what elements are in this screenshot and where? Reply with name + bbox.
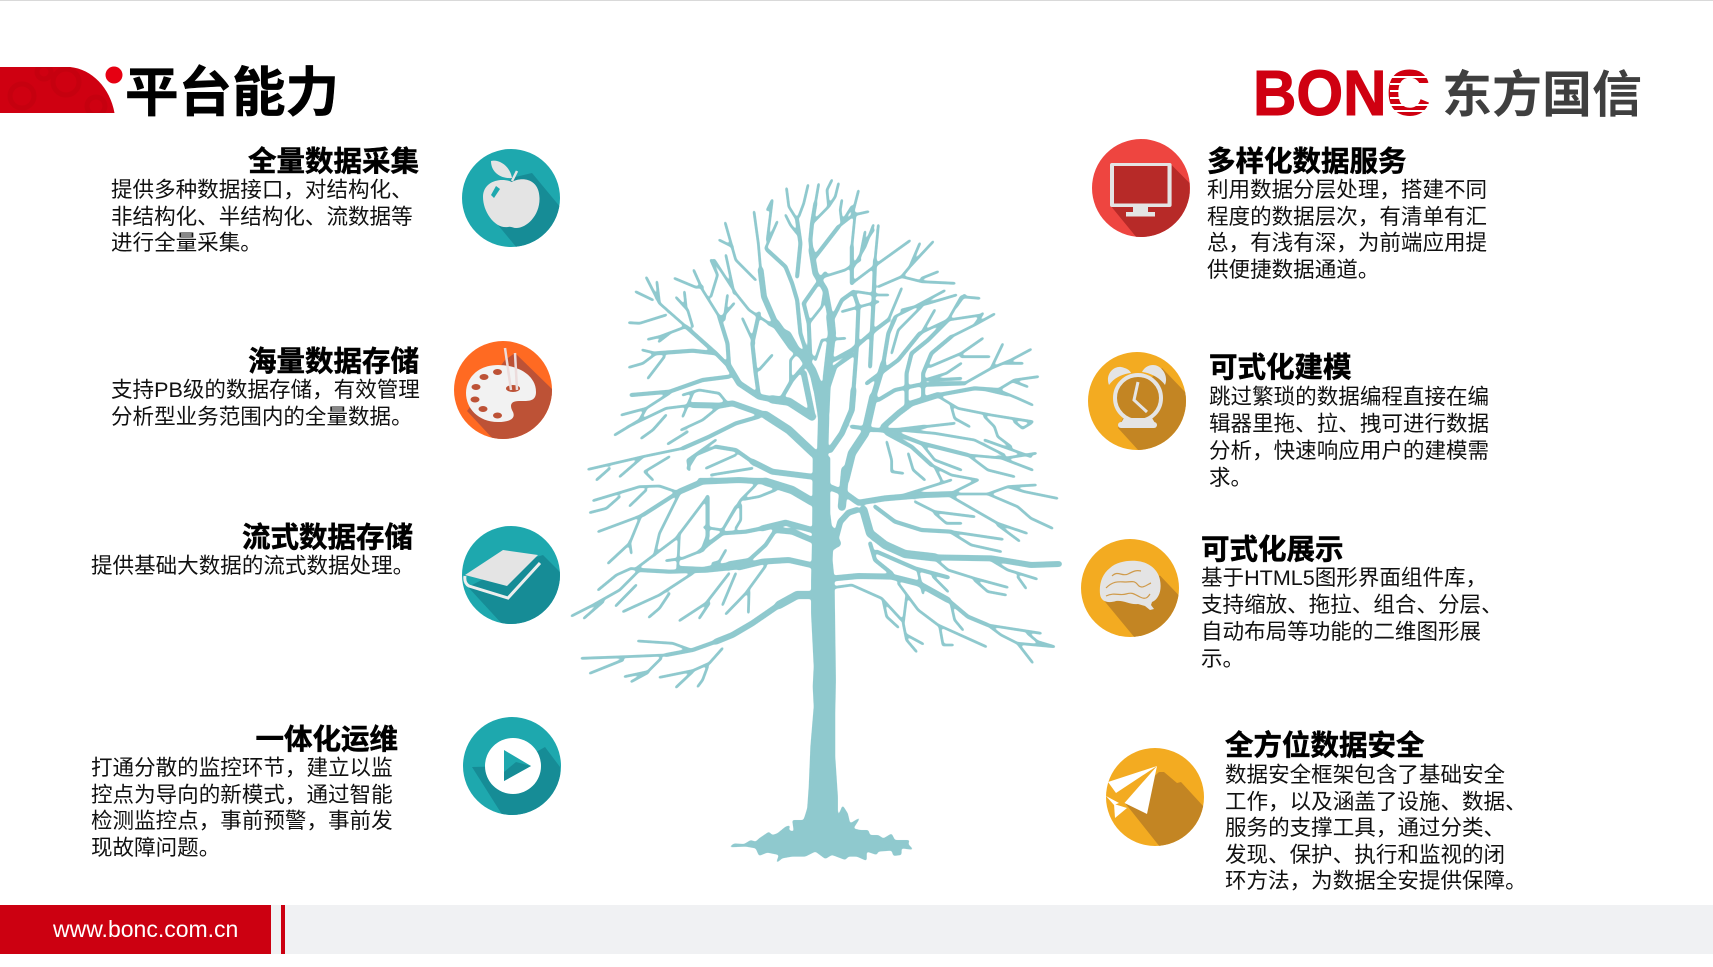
text block: 进行全量采集。	[111, 230, 262, 255]
text block: 求。	[1209, 465, 1252, 490]
text block: 工作，以及涵盖了设施、数据、	[1225, 789, 1527, 814]
footer red block with URL: www.bonc.com.cn	[53, 916, 238, 942]
text block	[111, 377, 420, 429]
heading: 可式化展示	[1201, 534, 1344, 566]
heading: 流式数据存储	[242, 522, 413, 554]
heading: 多样化数据服务	[1207, 146, 1407, 178]
text block	[91, 755, 393, 860]
text block: 分析型业务范围内的全量数据。	[111, 404, 413, 429]
logo: BONC 东方国信	[1253, 64, 1642, 123]
text block: 服务的支撑工具，通过分类、	[1225, 815, 1505, 840]
text block: 程度的数据层次，有清单有汇	[1207, 204, 1487, 229]
icon: book	[462, 526, 560, 624]
text block: 现故障问题。	[91, 835, 220, 860]
text block: 示。	[1201, 646, 1244, 671]
footer red block with URL	[0, 905, 271, 954]
text block: 提供基础大数据的流式数据处理。	[91, 553, 414, 578]
text block: 提供多种数据接口，对结构化、	[111, 177, 413, 202]
text block: 跳过繁琐的数据编程直接在编	[1209, 384, 1489, 409]
text block	[1209, 384, 1489, 490]
footer bar	[0, 905, 1713, 954]
heading: 全量数据采集	[248, 146, 419, 178]
text block: 支持缩放、拖拉、组合、分层、	[1201, 592, 1503, 617]
lower crown, trunk and ground	[572, 457, 1059, 864]
panel: 可式化展示	[1081, 534, 1503, 671]
text block: 数据安全框架包含了基础安全	[1225, 762, 1505, 787]
heading: 海量数据存储	[248, 346, 419, 378]
icon: apple	[462, 149, 560, 247]
text block: 环方法，为数据全安提供保障。	[1225, 868, 1527, 893]
panel: 全方位数据安全	[1106, 730, 1527, 893]
panel: 海量数据存储	[111, 341, 552, 439]
icon: monitor	[1092, 139, 1190, 237]
heading: 一体化运维	[255, 724, 398, 756]
text block: 检测监控点，事前预警，事前发	[91, 808, 393, 833]
panel: 可式化建模	[1088, 352, 1489, 490]
icon: alarm clock	[1088, 352, 1186, 450]
text block	[1225, 762, 1527, 893]
top hairline	[0, 0, 1713, 1]
upper crown	[588, 180, 1038, 480]
text block: 利用数据分层处理，搭建不同	[1207, 177, 1487, 202]
icon: paper plane	[1106, 748, 1204, 846]
text block: 基于HTML5图形界面组件库，	[1201, 565, 1487, 590]
text block: 发现、保护、执行和监视的闭	[1225, 842, 1505, 867]
text block: 供便捷数据通道。	[1207, 257, 1379, 282]
tree illustration	[570, 179, 1062, 862]
icon: brain	[1081, 539, 1179, 637]
panel: 多样化数据服务	[1092, 139, 1487, 282]
heading: 全方位数据安全	[1225, 730, 1425, 762]
logo Chinese name: 东方国信	[1442, 67, 1642, 123]
text block	[1201, 565, 1503, 671]
ground foliage	[728, 805, 914, 864]
panel: 流式数据存储	[91, 522, 560, 624]
panel: 全量数据采集	[111, 146, 560, 255]
icon: palette	[454, 341, 552, 439]
text block: 打通分散的监控环节，建立以监	[91, 755, 393, 780]
header red dome decoration	[0, 66, 122, 113]
title: 平台能力	[125, 64, 339, 123]
text block: 分析，快速响应用户的建模需	[1209, 438, 1489, 463]
text block: 辑器里拖、拉、拽可进行数据	[1209, 411, 1489, 436]
trunk	[802, 457, 842, 827]
footer red accent bar	[281, 905, 285, 954]
panel: 一体化运维	[91, 717, 561, 860]
text block	[1207, 177, 1487, 282]
text block: 非结构化、半结构化、流数据等	[111, 204, 413, 229]
icon: play	[463, 717, 561, 815]
text block: 总，有浅有深，为前端应用提	[1207, 230, 1487, 255]
heading: 可式化建模	[1209, 352, 1352, 384]
text block: 控点为导向的新模式，通过智能	[91, 782, 393, 807]
text block: 支持PB级的数据存储，有效管理	[111, 377, 420, 402]
text block: 自动布局等功能的二维图形展	[1201, 619, 1481, 644]
text block	[111, 177, 413, 255]
